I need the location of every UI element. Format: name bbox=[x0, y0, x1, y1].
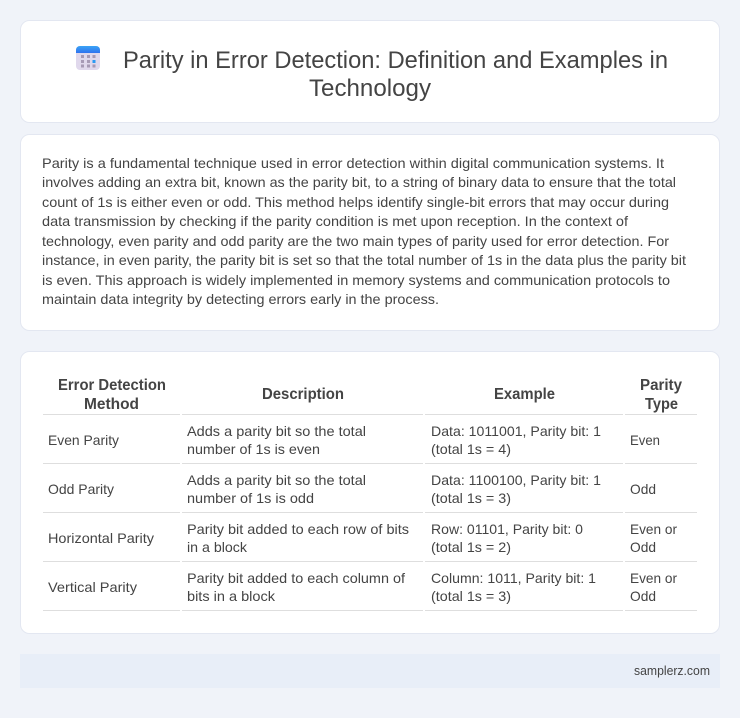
table row: vertical parity: Column: 1011, Parity bit: 1 bbox=[431, 570, 596, 586]
table row: vertical parity: bits in a block bbox=[187, 588, 276, 604]
table row: even parity: Even bbox=[630, 432, 660, 448]
table row: vertical parity: Even or bbox=[630, 570, 677, 586]
table row: horizontal parity bbox=[48, 521, 677, 555]
header panel bbox=[20, 20, 720, 122]
table row: vertical parity: Parity bit added to each column of bbox=[187, 570, 405, 586]
table header row: Type bbox=[645, 396, 678, 413]
text block: definition of parity: is even. This approach is widely implemented in memory systems and communication protocols to bbox=[42, 272, 670, 288]
table row: odd parity: Odd bbox=[630, 481, 656, 497]
table header row: Error Detection bbox=[58, 377, 166, 394]
table row: even parity: Data: 1011001, Parity bit: 1 bbox=[431, 423, 601, 439]
table rules bbox=[43, 414, 697, 611]
title bbox=[123, 47, 668, 102]
text block: definition of parity: technology, even parity and odd parity are the two main types of parity used for error detection. For bbox=[42, 233, 669, 249]
table row: horizontal parity: Row: 01101, Parity bit: 0 bbox=[431, 521, 583, 537]
table row: odd parity: (total 1s = 3) bbox=[431, 490, 511, 506]
text block: definition of parity bbox=[42, 155, 686, 307]
table row: vertical parity: (total 1s = 3) bbox=[431, 588, 511, 604]
text block: definition of parity: instance, in even parity, the parity bit is set so that the total number of 1s in the data plus the parity bit bbox=[42, 252, 686, 268]
text block: definition of parity: maintain data integrity by detecting errors early in the process. bbox=[42, 291, 439, 307]
table row: odd parity bbox=[48, 472, 656, 506]
table header row: Description bbox=[262, 386, 344, 403]
title: Technology bbox=[309, 75, 431, 102]
table row: odd parity: Data: 1100100, Parity bit: 1 bbox=[431, 472, 601, 488]
table row: even parity: (total 1s = 4) bbox=[431, 441, 511, 457]
table row: odd parity: Odd Parity bbox=[48, 481, 114, 497]
table row: even parity bbox=[48, 423, 660, 457]
table row: odd parity: number of 1s is odd bbox=[187, 490, 314, 506]
footer bar bbox=[20, 654, 720, 688]
footer text: samplerz.com bbox=[634, 663, 710, 678]
text block: definition of parity: involves adding an extra bit, known as the parity bit, to a string of binary data to ensure that the total bbox=[42, 174, 676, 190]
text block: definition of parity: count of 1s is either even or odd. This method helps identify single-bit errors that may occur during bbox=[42, 194, 669, 210]
panel: introduction bbox=[20, 134, 720, 330]
table header row: Example bbox=[494, 386, 555, 403]
table header row bbox=[58, 377, 682, 413]
table row: vertical parity: Vertical Parity bbox=[48, 579, 137, 595]
title: Parity in Error Detection: Definition and Examples in bbox=[123, 47, 668, 74]
text block: definition of parity: data transmission by checking if the parity condition is met upon reception. In the context of bbox=[42, 213, 628, 229]
table header row: Method bbox=[84, 396, 139, 413]
table row: even parity: number of 1s is even bbox=[187, 441, 320, 457]
table row: even parity: Adds a parity bit so the total bbox=[187, 423, 366, 439]
table row: odd parity: Adds a parity bit so the total bbox=[187, 472, 366, 488]
table row: horizontal parity: in a block bbox=[187, 539, 248, 555]
table row: vertical parity: Odd bbox=[630, 588, 656, 604]
table row: horizontal parity: Horizontal Parity bbox=[48, 530, 154, 546]
panel: comparison table bbox=[20, 352, 720, 634]
table row: horizontal parity: (total 1s = 2) bbox=[431, 539, 511, 555]
table row: vertical parity bbox=[48, 570, 677, 604]
table row: horizontal parity: Parity bit added to each row of bits bbox=[187, 521, 409, 537]
table row: horizontal parity: Even or bbox=[630, 521, 677, 537]
table header row: Parity bbox=[640, 377, 682, 394]
icon: calendar bbox=[76, 46, 100, 70]
table row: even parity: Even Parity bbox=[48, 432, 119, 448]
text block: definition of parity: Parity is a fundamental technique used in error detection within digital communication systems. It bbox=[42, 155, 664, 171]
table row: horizontal parity: Odd bbox=[630, 539, 656, 555]
